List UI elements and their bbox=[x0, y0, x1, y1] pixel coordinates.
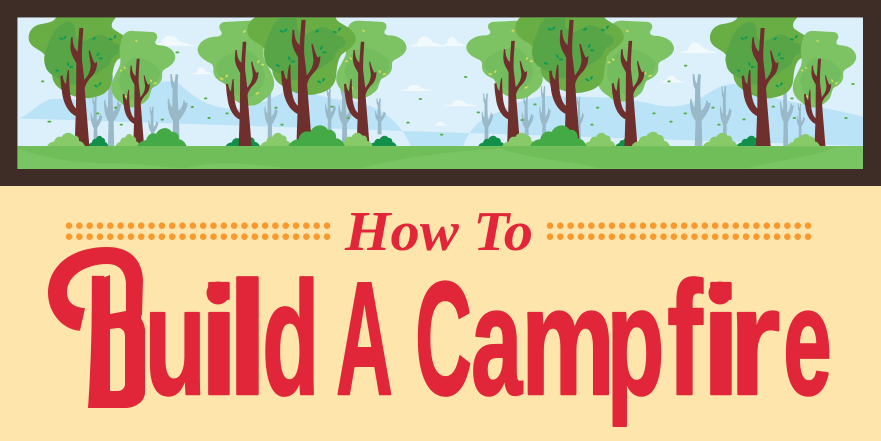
main title: Build A Campfire bbox=[48, 234, 832, 441]
main title: Build A Campfire: m bbox=[521, 256, 615, 427]
main title: Build A Campfire: f bbox=[667, 249, 703, 429]
clouds bbox=[149, 36, 718, 126]
tree canopy: light group bbox=[198, 21, 674, 106]
main title: Build A Campfire: e bbox=[783, 256, 832, 427]
drifting leaves bbox=[41, 51, 855, 136]
tree trunks bbox=[60, 20, 831, 146]
main title: Build A Campfire: i bbox=[702, 256, 740, 427]
wooden frame bbox=[0, 0, 881, 186]
main title: Build A Campfire: A bbox=[336, 249, 393, 429]
medium bushes bbox=[137, 125, 587, 146]
grass ground bbox=[17, 146, 863, 169]
tree canopy: dark group bbox=[29, 7, 856, 108]
main title: Build A Campfire: d bbox=[262, 249, 319, 429]
forest scene bbox=[17, 7, 863, 169]
main title: Build A Campfire: i bbox=[200, 256, 238, 427]
distant pale trees bbox=[91, 74, 805, 147]
dotted rule: right bbox=[550, 226, 811, 237]
distant hills bbox=[17, 81, 863, 146]
light bushes bbox=[47, 132, 820, 146]
main title: Build A Campfire: u bbox=[144, 256, 206, 427]
main title: Build A Campfire: C bbox=[415, 249, 472, 429]
dark bushes bbox=[88, 135, 763, 146]
main title: Build A Campfire: l bbox=[227, 249, 268, 429]
main title: Build A Campfire: a bbox=[471, 256, 523, 427]
sky bbox=[17, 17, 863, 169]
main title: Build A Campfire: r bbox=[729, 256, 780, 427]
subtitle: How To: How To bbox=[344, 201, 533, 263]
main title: Build A Campfire: p bbox=[607, 256, 664, 427]
dotted rule: left bbox=[69, 226, 330, 237]
